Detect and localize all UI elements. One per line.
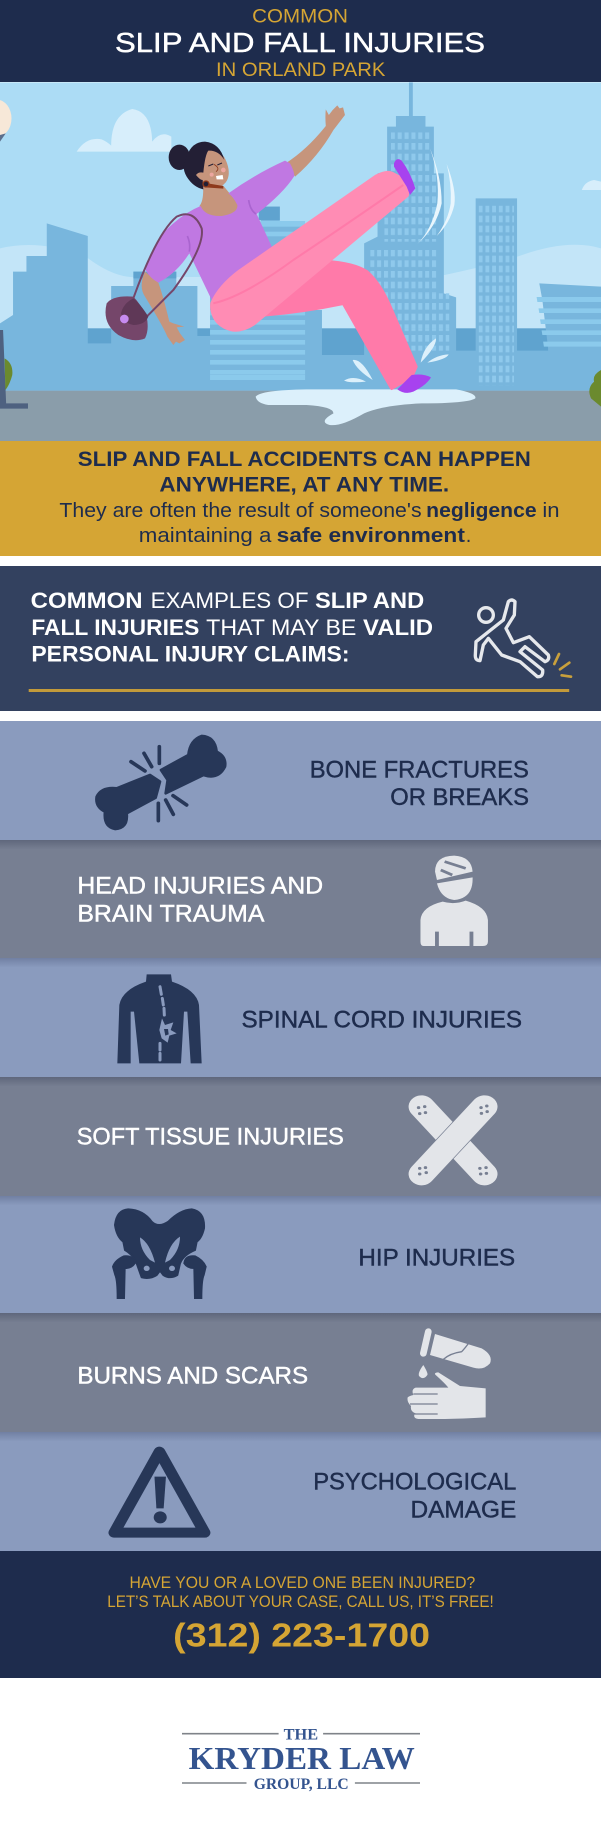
panel: soft tissue injuries [0,1077,601,1196]
panel: psychological damage: PSYCHOLOGICAL [313,1468,516,1495]
panel: head injuries [0,840,601,958]
logo: The Kryder Law Group, LLC [182,1726,420,1793]
call to action footer: (312) 223-1700 [173,1617,430,1654]
panel: common examples heading: COMMON [31,588,143,613]
icon: falling person [475,600,571,677]
panel: spinal cord injuries [0,958,601,1077]
panel: hip injuries: HIP INJURIES [358,1244,515,1271]
panel: bone fractures [0,721,601,840]
panel: head injuries: HEAD INJURIES AND [77,873,323,900]
panel: burns and scars [0,1313,601,1432]
intro callout band: SLIP AND FALL ACCIDENTS CAN HAPPEN [78,448,531,471]
call to action footer: LET’S TALK ABOUT YOUR CASE, CALL US, IT’S FREE! [107,1592,494,1611]
panel: common examples heading: FALL INJURIES [31,615,199,640]
call to action footer: HAVE YOU OR A LOVED ONE BEEN INJURED? [130,1573,475,1592]
icon: person with bandaged head [420,856,488,946]
illustration: woman slipping [106,105,455,393]
intro callout band [0,441,601,556]
title banner: IN ORLAND PARK [216,60,386,81]
panel: common examples heading [0,566,601,711]
intro callout band: ANYWHERE, AT ANY TIME. [159,474,449,497]
intro callout band: They are often the result of someone's [59,500,422,522]
call to action footer [0,1551,601,1678]
intro callout band: maintaining a [139,525,272,547]
illustration: city skyline background [0,82,601,442]
panel: soft tissue injuries: SOFT TISSUE INJURIES [77,1123,344,1150]
intro callout band: negligence [426,500,537,522]
icon: crossed bandages [419,1106,487,1174]
panel: common examples heading: PERSONAL INJURY CLAIMS: [31,642,350,667]
panel: psychological damage: DAMAGE [410,1497,516,1524]
icon: pelvis and hip joints [113,1209,206,1298]
intro callout band: in [542,500,560,522]
title banner: SLIP AND FALL INJURIES [115,27,485,58]
logo: The Kryder Law Group, LLC: GROUP, LLC [254,1776,349,1793]
panel: common examples heading: SLIP AND [315,588,424,613]
panel: hip injuries [0,1196,601,1313]
panel: burns and scars: BURNS AND SCARS [77,1362,308,1389]
icon: back with injured spine [117,974,202,1063]
panel: common examples heading: EXAMPLES OF [151,588,308,613]
panel: head injuries: BRAIN TRAUMA [77,901,264,928]
panel: bone fractures: BONE FRACTURES [310,757,529,784]
panel: bone fractures: OR BREAKS [390,784,529,811]
title banner [0,0,601,82]
intro callout band: safe environment [277,525,465,547]
panel: common examples heading: THAT MAY BE [206,615,356,640]
icon: warning triangle [114,1452,205,1533]
intro callout band: . [466,525,471,547]
logo: The Kryder Law Group, LLC: KRYDER LAW [189,1740,415,1776]
panel: common examples heading: VALID [363,615,433,640]
icon: chemical spilling on hand [407,1332,491,1419]
icon: broken bone [96,736,225,829]
title banner: COMMON [252,7,348,28]
panel: spinal cord injuries: SPINAL CORD INJURIES [242,1007,522,1034]
logo: The Kryder Law Group, LLC: THE [284,1726,318,1743]
panel: psychological damage [0,1432,601,1551]
